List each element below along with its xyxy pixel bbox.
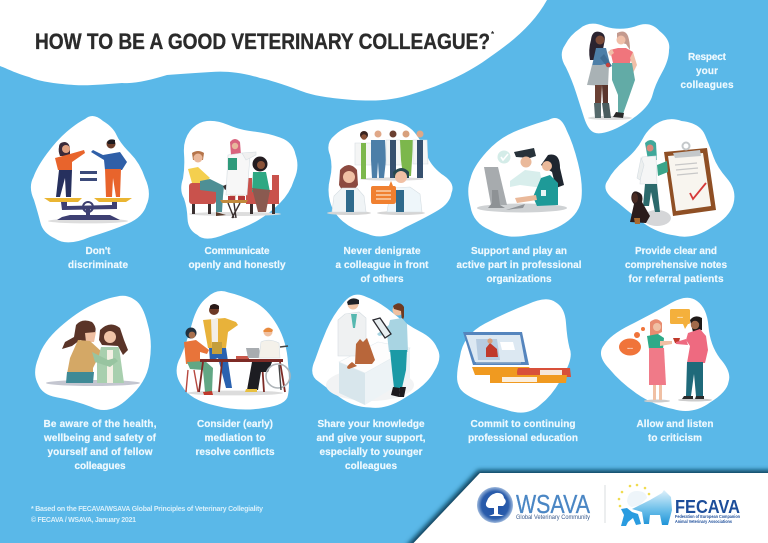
illustration: two people talking	[619, 309, 712, 402]
caption: yourself and of fellow	[48, 447, 153, 458]
caption: Commit to continuing	[470, 419, 576, 430]
caption: and give your support,	[316, 433, 426, 444]
panel: allow criticism	[601, 298, 729, 444]
logo: WSAVA	[477, 487, 591, 523]
caption: organizations	[486, 274, 552, 285]
caption: Be aware of the health,	[44, 419, 157, 430]
divider	[604, 485, 606, 523]
caption: Consider (early)	[197, 419, 273, 430]
caption: especially to younger	[320, 447, 423, 458]
caption	[456, 246, 582, 285]
caption	[468, 419, 578, 444]
panel: clear notes	[605, 119, 734, 285]
illustration: laptop and books	[463, 332, 571, 383]
panel: continuing education	[457, 299, 578, 444]
caption	[68, 246, 128, 271]
illustration: two colleagues	[587, 32, 637, 120]
caption	[636, 419, 714, 444]
logo: FECAVA	[618, 484, 740, 526]
panel: support organizations	[456, 118, 582, 285]
logo panel	[407, 473, 768, 543]
caption: Don't	[86, 246, 111, 257]
caption: Never denigrate	[344, 246, 421, 257]
footnote	[31, 506, 263, 524]
caption: colleagues	[680, 80, 734, 91]
caption: Support and play an	[471, 246, 567, 257]
caption	[336, 246, 429, 285]
caption: colleagues	[345, 461, 397, 472]
caption	[43, 419, 157, 472]
caption	[625, 246, 727, 285]
caption: openly and honestly	[188, 260, 286, 271]
blob	[312, 295, 439, 408]
panel: don't discriminate	[31, 116, 149, 271]
illustration: vet, cat and owner	[326, 298, 414, 405]
caption: Allow and listen	[636, 419, 714, 430]
illustration: two people talking: ...	[627, 344, 633, 351]
caption: resolve conflicts	[196, 447, 275, 458]
blob	[181, 121, 297, 239]
illustration: comforting friend	[46, 321, 140, 386]
logo: WSAVA: WSAVA	[516, 489, 591, 519]
panel: early mediation	[177, 291, 290, 458]
footnote: * Based on the FECAVA/WSAVA Global Principles of Veterinary Collegiality	[31, 506, 263, 513]
caption: active part in professional	[456, 260, 582, 271]
blob	[601, 298, 729, 411]
caption: to criticism	[648, 433, 702, 444]
caption: of others	[360, 274, 404, 285]
illustration: equal scale	[44, 139, 132, 223]
illustration: two people talking: ...	[677, 313, 683, 320]
caption: mediation to	[204, 433, 266, 444]
caption	[196, 419, 275, 458]
title: HOW TO BE A GOOD VETERINARY COLLEAGUE?	[35, 29, 490, 54]
blob	[35, 296, 151, 410]
logo: FECAVA: Federation of European Companion	[675, 514, 740, 519]
caption: discriminate	[68, 260, 128, 271]
panel: never denigrate	[327, 119, 453, 285]
logo: FECAVA: Animal Veterinary Associations	[675, 519, 732, 524]
caption: Provide clear and	[635, 246, 717, 257]
logo: FECAVA: FECAVA	[675, 497, 740, 517]
title wave panel	[0, 0, 547, 101]
caption	[188, 246, 286, 271]
panel: communicate openly	[181, 121, 297, 271]
blob	[457, 299, 571, 413]
caption: comprehensive notes	[625, 260, 727, 271]
panel: share knowledge	[312, 295, 439, 472]
caption	[680, 52, 734, 91]
caption: for referral patients	[628, 274, 724, 285]
illustration: consultation	[188, 139, 281, 218]
caption: colleagues	[74, 461, 126, 472]
blob	[468, 118, 582, 237]
caption: your	[696, 66, 718, 77]
blob	[605, 119, 734, 237]
caption: Respect	[688, 52, 727, 63]
caption	[316, 419, 426, 472]
caption: a colleague in front	[336, 260, 429, 271]
panel: respect your colleagues	[562, 24, 734, 133]
caption: professional education	[468, 433, 578, 444]
caption: Communicate	[204, 246, 270, 257]
illustration: meeting at table	[184, 304, 290, 395]
caption: Share your knowledge	[318, 419, 425, 430]
caption: wellbeing and safety of	[43, 433, 157, 444]
blob	[31, 116, 149, 242]
illustration: clipboard, vet and dog	[630, 140, 716, 226]
logo: WSAVA: Global Veterinary Community	[516, 515, 590, 521]
blob	[562, 24, 669, 133]
blob	[328, 119, 453, 236]
title: *	[491, 30, 495, 39]
footnote: © FECAVA / WSAVA, January 2021	[31, 516, 136, 524]
panel: health and wellbeing	[35, 296, 157, 472]
illustration: vets	[327, 130, 428, 215]
illustration: colleagues at computer	[477, 148, 567, 212]
blob	[177, 291, 289, 410]
